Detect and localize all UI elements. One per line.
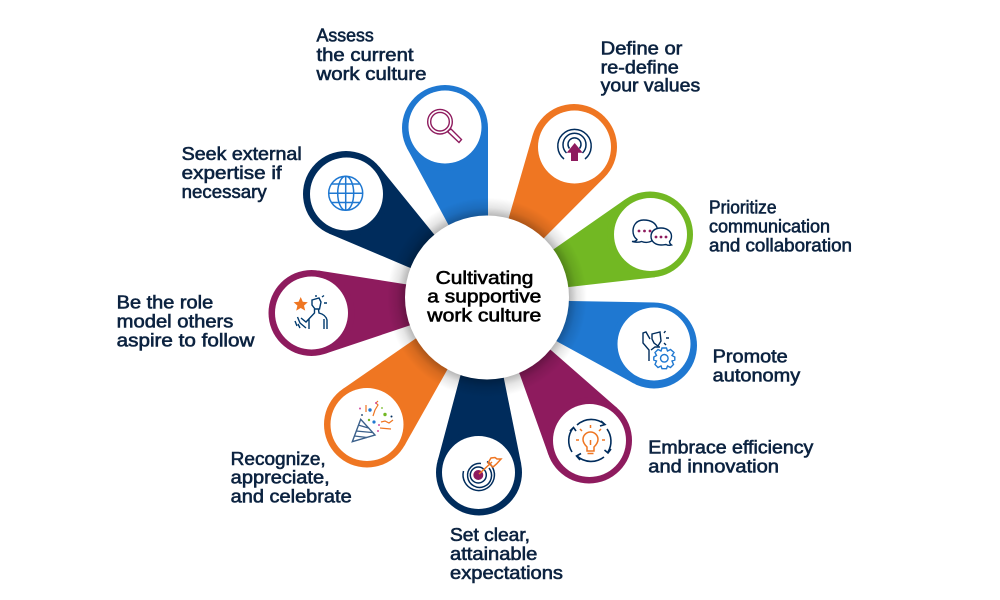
label: seek external expertise if necessary: expertise if <box>182 163 283 183</box>
icon: globe <box>329 176 363 210</box>
label: set clear, attainable expectations: expectations <box>450 563 563 583</box>
petal: recognize (orange) <box>324 297 487 468</box>
icon: pencil gear and raised hand <box>643 331 675 369</box>
label: embrace efficiency and innovation: and innovation <box>648 457 779 477</box>
label: assess the current work culture <box>315 26 426 84</box>
label: be the role model others aspire to follow: Be the role <box>117 292 213 312</box>
label: be the role model others aspire to follow <box>117 292 256 351</box>
petal: communication (green) <box>487 192 693 297</box>
icon: role model with star <box>294 295 327 329</box>
centre circle with title <box>405 216 569 380</box>
label: recognize, appreciate, and celebrate: Recognize, <box>231 449 326 469</box>
label: define or re-define your values: Define or <box>601 38 682 58</box>
label: prioritize communication and collaboration: Prioritize <box>709 197 776 217</box>
label: define or re-define your values: your values <box>601 76 700 96</box>
label: promote autonomy: autonomy <box>713 366 800 386</box>
label: define or re-define your values: re-define <box>601 57 679 77</box>
icon: magnifying glass <box>428 109 462 142</box>
label: prioritize communication and collaboration <box>709 197 852 256</box>
petal: assess (blue) <box>402 85 488 297</box>
label: be the role model others aspire to follow: model others <box>117 312 233 332</box>
icon: party popper <box>352 401 393 442</box>
label: embrace efficiency and innovation <box>648 437 813 477</box>
label: promote autonomy <box>713 347 800 386</box>
label: embrace efficiency and innovation: Embrace efficiency <box>648 437 813 457</box>
label: define or re-define your values <box>601 38 700 96</box>
label: set clear, attainable expectations <box>450 525 563 583</box>
label: promote autonomy: Promote <box>713 347 788 367</box>
label: assess the current work culture: Assess <box>316 26 374 46</box>
icon: target with up arrow <box>558 129 591 161</box>
petal: autonomy (blue) <box>487 297 697 388</box>
label: seek external expertise if necessary <box>182 144 302 202</box>
label: set clear, attainable expectations: attainable <box>450 544 537 564</box>
label: assess the current work culture: work culture <box>315 64 426 84</box>
centre circle with title: a supportive <box>427 287 541 307</box>
icon: light bulb with cycle arrows <box>569 419 611 461</box>
label: prioritize communication and collaboration: communication <box>709 216 830 236</box>
petal: efficiency (purple) <box>487 297 632 484</box>
icon: dartboard with arrow <box>463 458 501 491</box>
icon: speech bubbles <box>632 220 672 245</box>
centre circle with title: Cultivating <box>436 268 533 288</box>
petal: expectations (navy) <box>436 297 522 516</box>
petal: external expertise (navy) <box>303 151 487 297</box>
label: prioritize communication and collaboration: and collaboration <box>709 236 852 256</box>
label: seek external expertise if necessary: necessary <box>182 182 267 202</box>
label: recognize, appreciate, and celebrate: appreciate, <box>231 467 330 487</box>
label: recognize, appreciate, and celebrate <box>231 449 352 507</box>
centre circle with title: work culture <box>426 306 541 326</box>
label: assess the current work culture: the current <box>316 45 414 65</box>
label: seek external expertise if necessary: Seek external <box>182 144 302 164</box>
label: be the role model others aspire to follow: aspire to follow <box>117 331 256 351</box>
petal: role model (purple) <box>268 270 487 356</box>
petal: define values (orange) <box>487 104 617 297</box>
label: recognize, appreciate, and celebrate: and celebrate <box>231 487 352 507</box>
label: set clear, attainable expectations: Set clear, <box>450 525 530 545</box>
